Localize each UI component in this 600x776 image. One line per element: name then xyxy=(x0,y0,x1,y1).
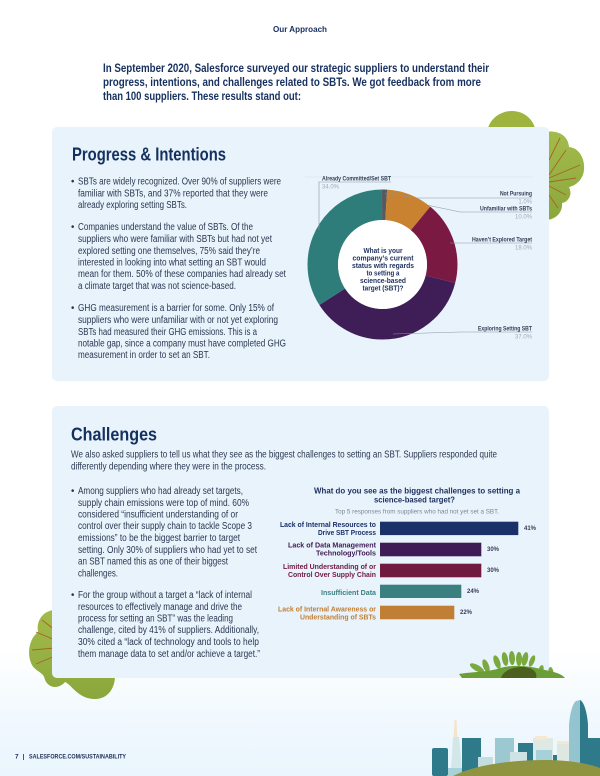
text block: progress bullets xyxy=(71,176,286,361)
donut centre question: What is your xyxy=(364,246,403,255)
heading: progress: Progress & Intentions xyxy=(72,144,226,164)
bar values: 22% xyxy=(460,610,473,616)
chart title: What do you see as the biggest challenges to setting a xyxy=(314,486,520,496)
page header: Our Approach xyxy=(273,24,327,34)
text block: challenges bullets: 30% cited a “lack of technology and tools to help xyxy=(78,637,259,648)
donut centre question: to setting a xyxy=(366,268,400,277)
donut centre question xyxy=(352,246,414,292)
text block: progress bullets: explored setting one themselves, 75% said they’re xyxy=(78,246,260,257)
bar labels: Lack of Data Management xyxy=(288,541,377,550)
text block: progress bullets: • xyxy=(71,176,75,188)
text block: challenges bullets: For the group without a target a “lack of internal xyxy=(78,590,252,601)
donut labels: 1.0% xyxy=(518,200,533,206)
chart title: science-based target? xyxy=(374,494,455,504)
donut centre question: target (SBT)? xyxy=(362,283,404,292)
bar labels: Lack of Internal Resources to xyxy=(280,520,376,529)
donut centre question: status with regards xyxy=(352,261,414,270)
text block: progress bullets: interested in looking into what setting an SBT would xyxy=(78,258,266,268)
bar values: 30% xyxy=(487,547,500,553)
donut labels: 37.0% xyxy=(515,334,533,340)
text block: challenges bullets: Among suppliers who had already set targets, xyxy=(78,486,243,497)
leaf: right of progress panel xyxy=(545,132,584,220)
panel: progress and intentions xyxy=(52,127,549,381)
text block: challenges intro: We also asked suppliers to tell us what they see as the biggest challenges to setting an SBT. Suppliers responded quite xyxy=(71,450,497,460)
text block: challenges bullets: resources to effectively manage and drive the xyxy=(78,602,242,613)
text block: challenges bullets: emissions” to be the biggest barrier to target xyxy=(78,533,240,544)
hill xyxy=(453,760,600,776)
text block: progress bullets: • xyxy=(71,222,75,233)
text block: progress bullets: suppliers who were familiar with SBTs but had not yet xyxy=(78,234,272,245)
leaf: top right semicircle xyxy=(488,111,535,128)
bars xyxy=(380,522,518,619)
text block: challenges bullets: control over their supply chain to tackle Scope 3 xyxy=(78,521,252,532)
text block: progress bullets: already exploring setting SBTs. xyxy=(78,200,187,211)
bar values: 24% xyxy=(467,589,480,595)
text block: progress bullets: GHG measurement is a barrier for some. Only 15% of xyxy=(78,303,274,314)
text block: progress bullets: • xyxy=(71,303,75,314)
donut labels: 10.0% xyxy=(515,214,533,220)
intro paragraph: In September 2020, Salesforce surveyed our strategic suppliers to understand their xyxy=(103,62,489,75)
donut labels: Already Committed/Set SBT xyxy=(322,176,391,182)
text block: challenges bullets: • xyxy=(71,486,75,497)
donut labels: 18.0% xyxy=(515,246,533,252)
bar values: 41% xyxy=(524,526,537,532)
intro paragraph: than 100 suppliers. These results stand out: xyxy=(103,90,301,103)
text block: progress bullets: a climate target that was not science-based. xyxy=(78,281,236,292)
text block: challenges bullets: supply chain emissions were top of mind. 60% xyxy=(78,498,249,509)
text block: challenges intro: differently depending where they were in the process. xyxy=(71,462,266,472)
text block: progress bullets: SBTs are widely recognized. Over 90% of suppliers were xyxy=(78,176,281,188)
donut labels: 34.0% xyxy=(322,184,340,190)
text block: progress bullets: SBTs had measured their GHG emissions. This is a xyxy=(78,327,257,338)
text block: challenges bullets: challenges. xyxy=(78,568,118,580)
text block: challenges bullets: process for setting an SBT” was the leading xyxy=(78,614,233,624)
bar labels: Limited Understanding of or xyxy=(283,562,376,571)
text block: progress bullets: Companies understand the value of SBTs. Of the xyxy=(78,222,253,233)
text block: challenges bullets: challenge, cited by 41% of suppliers. Additionally, xyxy=(78,625,259,636)
bar labels: Lack of Internal Awareness or xyxy=(278,605,376,614)
chart subtitle: Top 5 responses from suppliers who had not yet set a SBT. xyxy=(335,508,499,516)
icon: bush on challenges panel xyxy=(459,651,565,678)
intro paragraph xyxy=(103,62,489,103)
text block: challenges bullets xyxy=(71,486,260,660)
text block: progress bullets: suppliers who were unfamiliar with or not yet exploring xyxy=(78,315,278,326)
bar values: 30% xyxy=(487,568,500,574)
illustration: city skyline xyxy=(432,700,600,776)
donut labels: Exploring Setting SBT xyxy=(478,326,532,332)
footer: SALESFORCE.COM/SUSTAINABILITY xyxy=(29,754,127,760)
donut centre question: company’s current xyxy=(352,253,414,262)
bar labels xyxy=(278,520,377,622)
text block: progress bullets: familiar with SBTs, and 37% reported that they were xyxy=(78,188,268,200)
text block: challenges bullets: • xyxy=(71,590,75,601)
donut labels: Unfamiliar with SBTs xyxy=(480,206,533,212)
bar labels: Understanding of SBTs xyxy=(300,613,376,622)
footer: 7 xyxy=(15,754,19,760)
text block: progress bullets: mean for them. 50% of these companies had already set xyxy=(78,269,286,280)
text block: challenges intro xyxy=(71,450,497,472)
text block: challenges bullets: setting. Only 30% of suppliers who had yet to set xyxy=(78,545,257,556)
text block: challenges bullets: considered “insufficient understanding of or xyxy=(78,510,239,520)
donut labels xyxy=(322,176,533,340)
intro paragraph: progress, intentions, and challenges related to SBTs. We got feedback from more xyxy=(103,76,481,89)
donut chart xyxy=(305,176,533,340)
bar labels: Technology/Tools xyxy=(316,549,376,558)
text block: challenges bullets: an SBT named this as one of their biggest xyxy=(78,556,228,568)
text block: challenges bullets: them manage data to set and/or achieve a target.” xyxy=(78,649,260,660)
donut centre question: science-based xyxy=(360,276,406,285)
text block: progress bullets: notable gap, since a company must have completed GHG xyxy=(78,338,286,350)
bar chart: challenges xyxy=(278,486,537,622)
chart title xyxy=(314,486,520,504)
heading: challenges: Challenges xyxy=(71,424,157,444)
donut labels: Not Pursuing xyxy=(500,192,532,198)
footer: | xyxy=(22,754,24,760)
bar labels: Drive SBT Process xyxy=(318,528,376,537)
bar labels: Control Over Supply Chain xyxy=(288,570,376,579)
panel: challenges xyxy=(52,406,549,678)
leaf: left of challenges panel xyxy=(29,610,115,699)
bar values xyxy=(460,526,537,616)
donut labels: Haven’t Explored Target xyxy=(472,238,532,244)
bar labels: Insufficient Data xyxy=(321,588,377,597)
text block: progress bullets: measurement in order to set an SBT. xyxy=(78,350,210,361)
